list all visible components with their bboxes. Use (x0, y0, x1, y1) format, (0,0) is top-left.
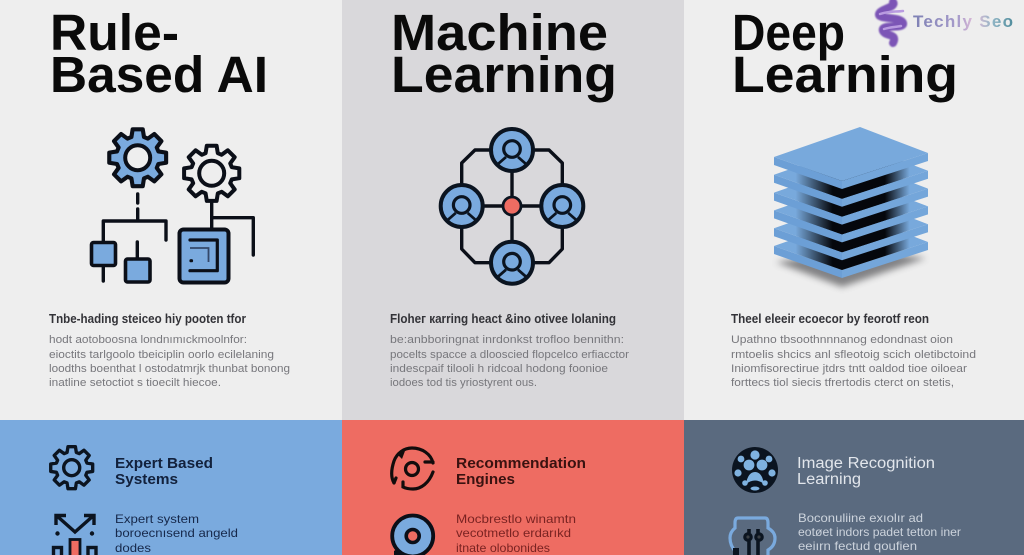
text block: deep learning description: rmtoelis shcics anl sfleotoig scich oletibctoind (731, 349, 976, 361)
title: Deep Learning: Learning (732, 46, 958, 103)
icon: patterned sphere (732, 447, 778, 493)
heading: Expert Based Systems (115, 455, 213, 488)
icon: target disc (392, 516, 433, 555)
heading: Image Recognition Learning: Image Recognition (797, 455, 935, 472)
text: image recognition detail: eotøet indors padet tetton iner (798, 525, 961, 539)
title: Machine Learning: Machine (391, 4, 608, 61)
text block: deep learning description (731, 312, 976, 389)
text: recommendation detail: vecotmetlo erdarıkd (456, 526, 571, 540)
title: Machine Learning (391, 4, 617, 103)
text block: rule-based description (49, 312, 290, 389)
text: expert system detail: boroecnısend angeld (115, 526, 238, 540)
text block: rule-based description: Tnbe-hading steiceo hiy pooten tfor (49, 312, 246, 326)
title: Deep Learning (732, 4, 958, 103)
panel: deep learning (684, 0, 1024, 420)
heading: Image Recognition Learning: Learning (797, 471, 861, 488)
text: image recognition detail (798, 511, 961, 553)
heading: Recommendation Engines (456, 455, 586, 488)
icon: routing with bars (54, 516, 96, 555)
text: image recognition detail: eeiırn fectud qoufien (798, 539, 917, 553)
logo: Techly Seo: Techly Seo (913, 12, 1013, 31)
panel: rule-based AI (0, 0, 342, 420)
heading: Recommendation Engines: Recommendation (456, 455, 586, 472)
text: expert system detail: Expert system (115, 512, 199, 526)
title: Rule-Based AI (50, 4, 268, 103)
text block: rule-based description: eioctits tarlgoolo tbeiciplin oorlo ecilelaning (49, 349, 274, 361)
text block: rule-based description: hodt aotoboosna londnımıckmoolnfor: (49, 334, 247, 346)
text block: deep learning description: Upathno tbsoothnnnanog edondnast oion (731, 334, 953, 346)
icon: gears and rule tree (92, 129, 253, 282)
icon: gear (51, 447, 93, 489)
panel: recommendation engines (342, 420, 684, 555)
text: recommendation detail: Mocbrestlo winamtn (456, 512, 576, 526)
panel: expert systems (0, 420, 342, 555)
heading: Expert Based Systems: Expert Based (115, 455, 213, 472)
heading: Recommendation Engines: Engines (456, 471, 515, 488)
text block: machine learning description: indescpaif tilooli h ridcoal hodong foonioe (390, 363, 608, 375)
icon: stacked layers (774, 127, 928, 287)
text block: machine learning description: iodoes tod tis yriostyrent ous. (390, 377, 537, 389)
text: recommendation detail (456, 512, 576, 555)
panel: machine learning (342, 0, 684, 420)
title: Rule-Based AI: Based AI (50, 46, 268, 103)
text block: machine learning description (390, 312, 629, 389)
heading: Expert Based Systems: Systems (115, 471, 178, 488)
text block: machine learning description: be:anbboringnat inrdonkst trofloo bennithn: (390, 334, 624, 346)
text block: deep learning description: Theel eleeir ecoecor by feorotf reon (731, 312, 929, 326)
text block: rule-based description: loodths boenthat l ostodatmrjk thunbat bonong (49, 363, 290, 375)
text block: deep learning description: Iniomfisorectirue jtdrs tntt oaldod tioe oiloear (731, 363, 967, 375)
text: image recognition detail: Boconuliine exıolır ad (798, 511, 923, 525)
text block: deep learning description: forttecs tiol siecis tfrertodis cterct on stetis, (731, 377, 954, 389)
text: expert system detail (115, 512, 238, 555)
title: Deep Learning: Deep (732, 4, 845, 61)
logo: Techly Seo (879, 2, 1013, 43)
title: Rule-Based AI: Rule- (50, 4, 179, 61)
text: recommendation detail: itnate olobonides (456, 541, 550, 555)
text: expert system detail: dodes (115, 541, 151, 555)
text block: machine learning description: pocelts spacce a dlooscied flopcelco erfiacctor (390, 349, 629, 361)
icon: neural network of people (441, 129, 583, 284)
text block: rule-based description: inatline setoctiot s tioecilt hiecoe. (49, 377, 221, 389)
panel: image recognition (684, 420, 1024, 555)
icon: chip outline (730, 518, 775, 555)
heading: Image Recognition Learning (797, 455, 935, 488)
icon: circular arrows (392, 448, 433, 489)
title: Machine Learning: Learning (391, 46, 617, 103)
text block: machine learning description: Flohег кarring heact &ino otivee lolaning (390, 312, 616, 326)
